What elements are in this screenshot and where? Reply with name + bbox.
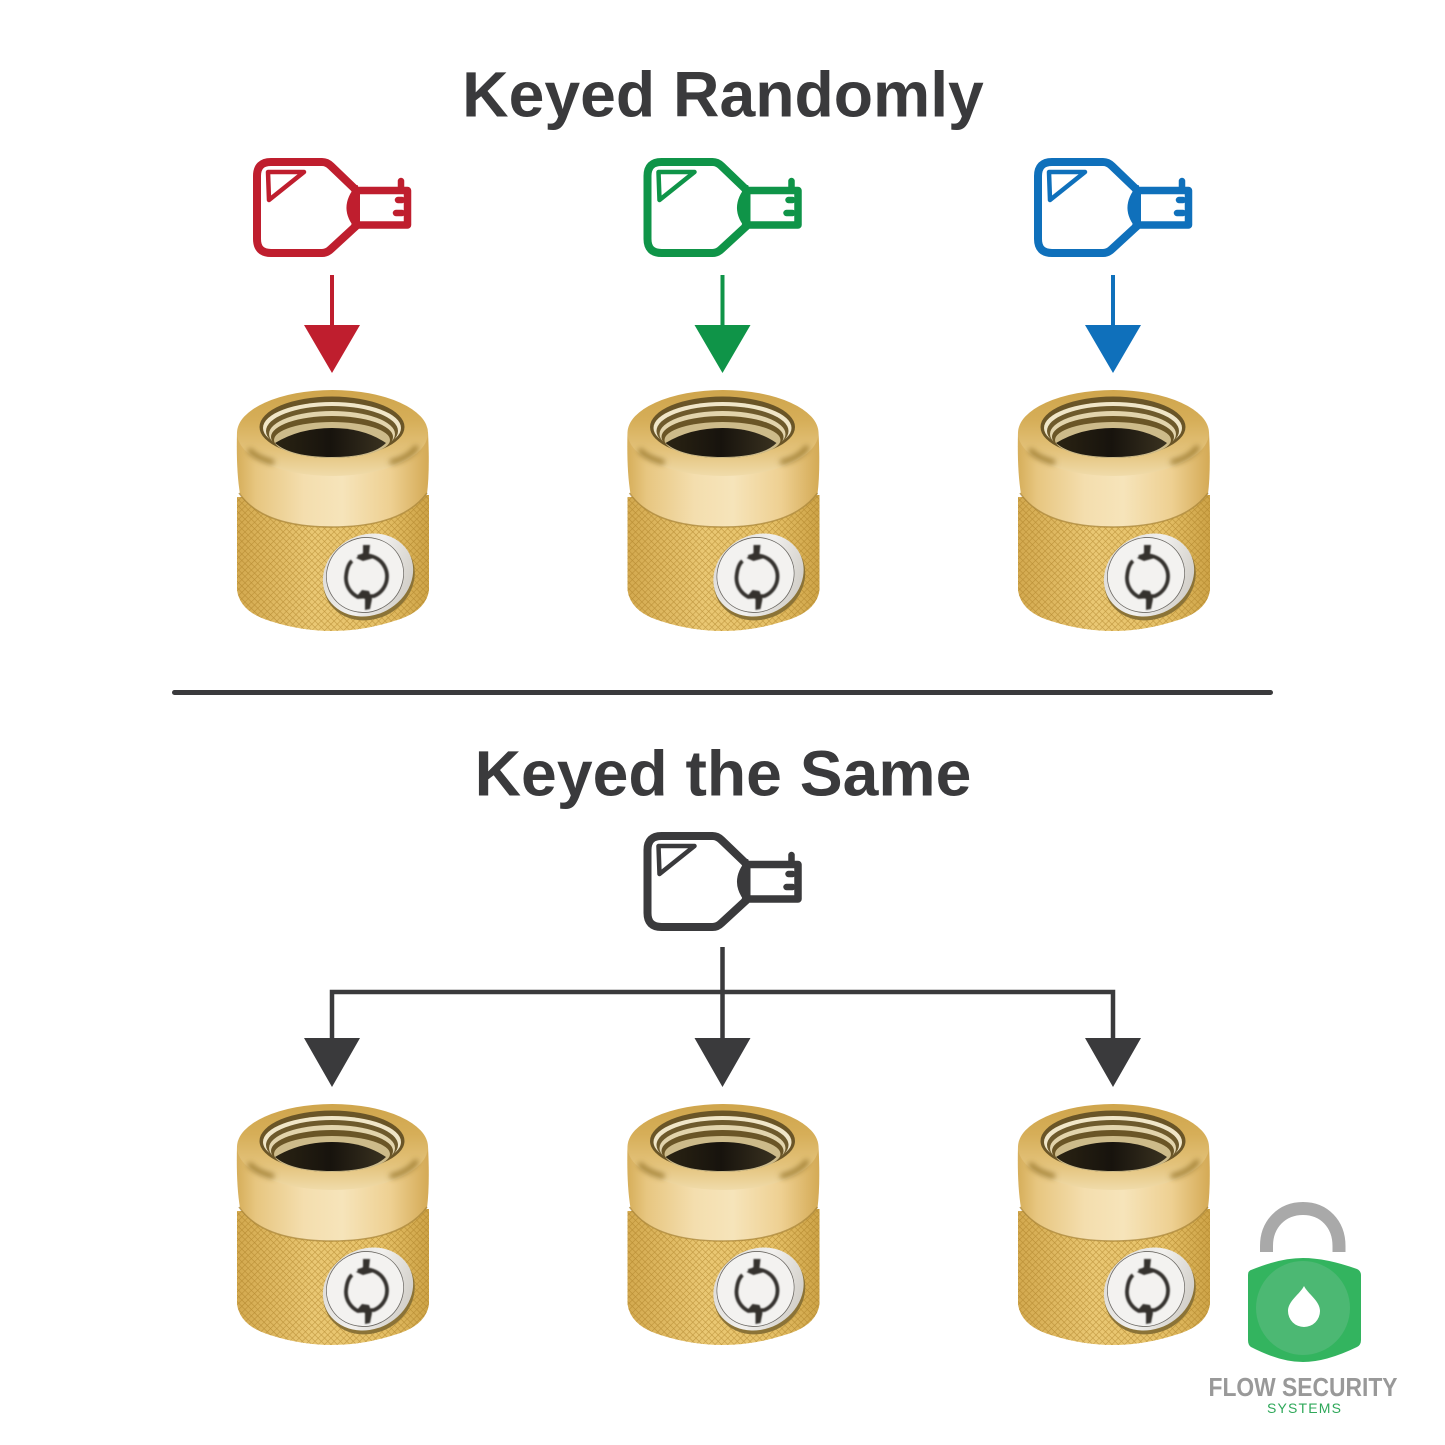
product: brass lock, bottom center [627, 1104, 820, 1350]
arrow: red [304, 275, 360, 373]
product: brass lock, top left [237, 390, 430, 636]
logo subtext: SYSTEMS [1267, 1400, 1341, 1416]
icon: dark key [648, 836, 798, 927]
icon: padlock shackle [1266, 1208, 1339, 1252]
title: Keyed Randomly: Keyed Randomly [462, 58, 984, 130]
arrow: branching tree to three locks [304, 947, 1141, 1087]
arrow: green [694, 275, 750, 373]
icon: padlock inner circle [1256, 1261, 1350, 1355]
arrow: blue [1085, 275, 1141, 373]
title: Keyed the Same: Keyed the Same [475, 738, 971, 810]
product: brass lock, bottom left [237, 1104, 430, 1350]
product: brass lock, bottom right [1018, 1104, 1211, 1350]
icon: red key [257, 162, 408, 253]
divider [172, 690, 1273, 695]
icon: blue key [1038, 162, 1188, 253]
icon: water drop [1288, 1286, 1320, 1327]
logo text: FLOW SECURITY [1208, 1372, 1398, 1402]
product: brass lock, top center [627, 390, 820, 636]
icon: padlock body [1248, 1258, 1361, 1362]
logo: Flow Security Systems [1208, 1208, 1398, 1416]
icon: green key [648, 162, 798, 253]
product: brass lock, top right [1018, 390, 1211, 636]
